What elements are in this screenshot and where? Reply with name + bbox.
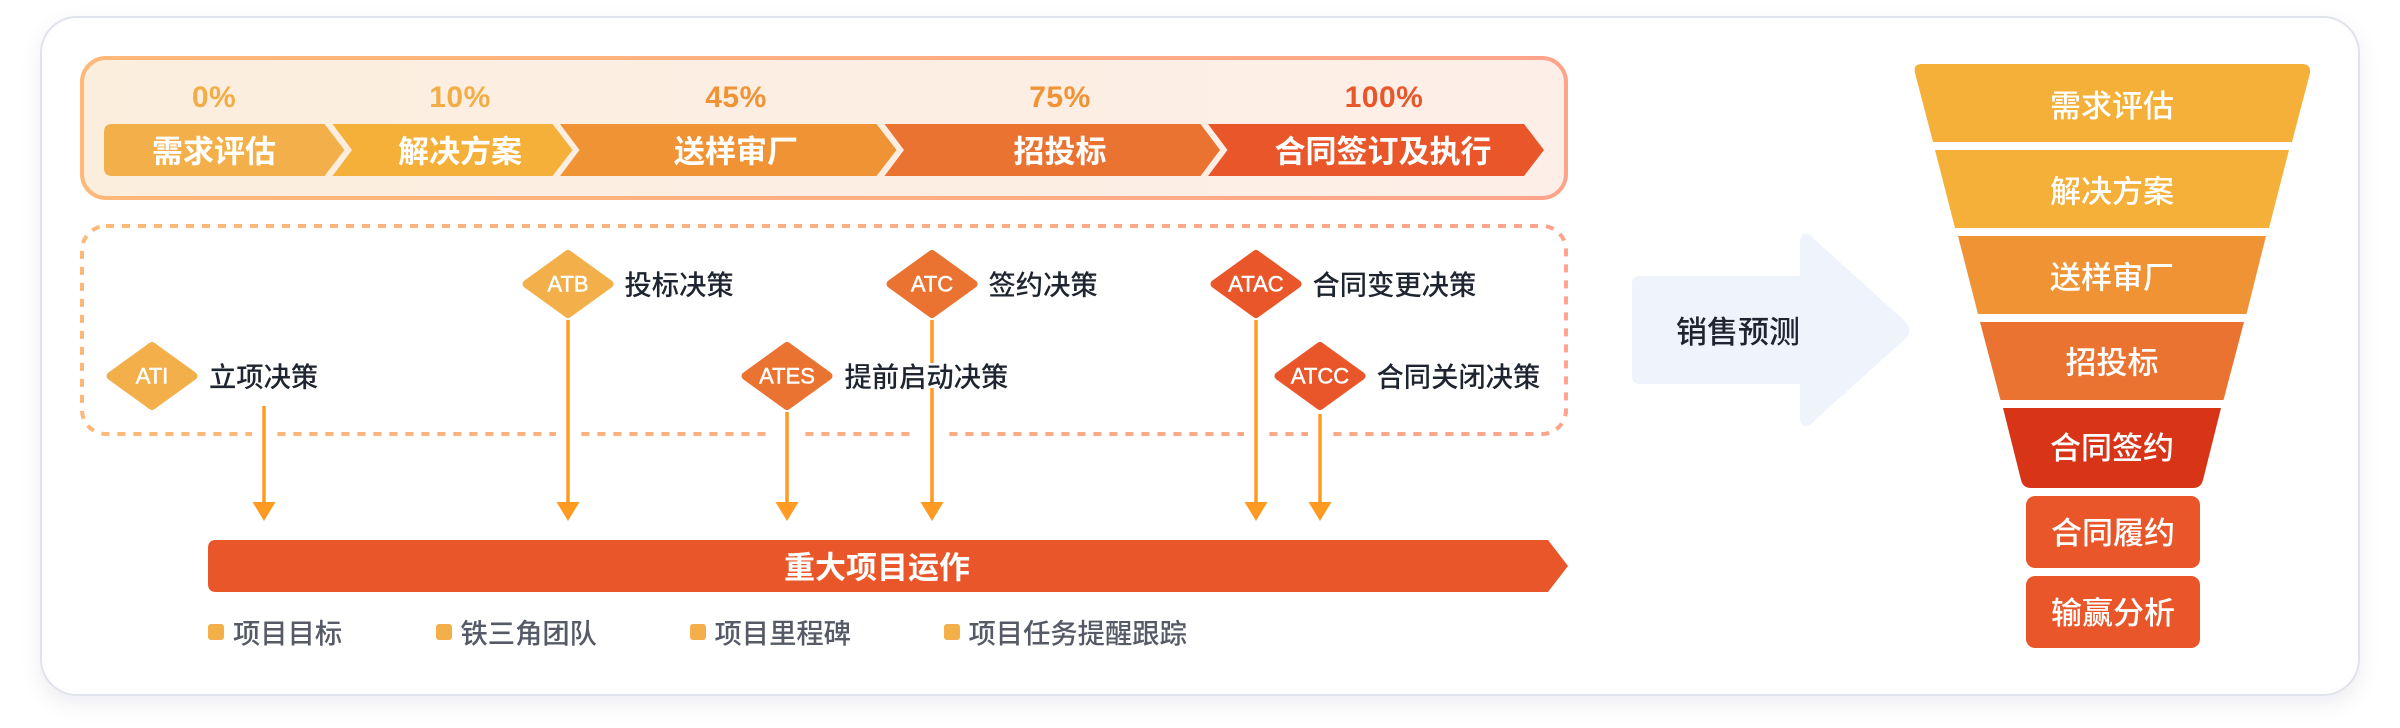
decision ATC with connector arrow: ATC: [911, 272, 953, 296]
stage box: 输赢分析: 输赢分析: [2051, 596, 2175, 631]
decision ATAC with connector arrow: [1214, 254, 1476, 521]
major project operation bar: 重大项目运作: [784, 550, 970, 586]
stage chevron: 合同签订及执行: 合同签订及执行: [1274, 134, 1492, 170]
stage chevron: 合同签订及执行: [1208, 124, 1544, 176]
decision ATCC with connector arrow: [1278, 346, 1540, 521]
stage box: 合同履约: 合同履约: [2051, 516, 2175, 551]
funnel level: 需求评估: 需求评估: [2050, 89, 2174, 124]
stage chevron: 需求评估: 需求评估: [152, 134, 276, 170]
funnel level: 招投标: [1980, 322, 2244, 400]
decision ATI with connector arrow: ATI: [136, 364, 168, 388]
decision ATES with connector arrow: 提前启动决策: [844, 362, 1008, 392]
legend item: 项目里程碑: 项目里程碑: [714, 618, 851, 649]
decision ATES with connector arrow: [746, 346, 1011, 521]
legend item: 铁三角团队: 铁三角团队: [460, 618, 597, 649]
funnel: [1915, 64, 2310, 648]
stage chevron: 解决方案: [332, 124, 572, 176]
decision ATI with connector arrow: 立项决策: [209, 362, 318, 392]
percentage: 10%: 10%: [429, 81, 491, 114]
legend: [208, 618, 1187, 649]
decision ATCC with connector arrow: 合同关闭决策: [1376, 362, 1540, 392]
percentage: 0%: 0%: [192, 81, 236, 114]
decision ATB with connector arrow: ATB: [547, 272, 589, 296]
funnel level: 招投标: 招投标: [2066, 346, 2158, 380]
decision ATB with connector arrow: [526, 254, 734, 521]
stage box: 合同履约: [2026, 496, 2200, 568]
percentage: 100%: 100%: [1345, 81, 1423, 114]
stage chevron: 送样审厂: [560, 124, 896, 176]
percentage: 75%: 75%: [1029, 81, 1091, 114]
panel: decision points dashed frame: [82, 226, 1566, 434]
major project operation bar: [208, 540, 1568, 592]
decision ATAC with connector arrow: 合同变更决策: [1312, 270, 1476, 300]
decision ATI with connector arrow: [110, 346, 318, 521]
stage chevron: 送样审厂: 送样审厂: [674, 134, 798, 170]
percentage: 45%: 45%: [705, 81, 767, 114]
legend item: 项目任务提醒跟踪: 项目任务提醒跟踪: [968, 618, 1187, 649]
decision ATES with connector arrow: ATES: [759, 364, 815, 388]
funnel level: 解决方案: 解决方案: [2050, 174, 2174, 210]
funnel level: 解决方案: [1935, 150, 2289, 228]
decision ATC with connector arrow: [890, 254, 1098, 521]
funnel level: 送样审厂: [1958, 236, 2266, 314]
decision ATAC with connector arrow: ATAC: [1228, 272, 1284, 296]
funnel level: 合同签约: [2003, 408, 2221, 488]
stage chevron: 需求评估: [104, 124, 344, 176]
decision ATB with connector arrow: 投标决策: [624, 270, 734, 300]
decision ATC with connector arrow: 签约决策: [988, 270, 1098, 300]
funnel level: 需求评估: [1915, 64, 2310, 142]
stage chevron: 招投标: [884, 124, 1220, 176]
stage chevron: 解决方案: 解决方案: [398, 134, 522, 170]
dashed frame gaps at connectors: [252, 428, 1332, 440]
legend item: 项目目标: 项目目标: [233, 618, 342, 649]
stage chevron: 招投标: 招投标: [1014, 134, 1106, 170]
stage box: 输赢分析: [2026, 576, 2200, 648]
big arrow: 销售预测: 销售预测: [1676, 315, 1800, 350]
panel: stage progress: [82, 58, 1566, 198]
funnel level: 合同签约: 合同签约: [2050, 431, 2174, 466]
funnel level: 送样审厂: 送样审厂: [2050, 260, 2174, 296]
big arrow: 销售预测: [1632, 234, 1910, 426]
decision ATCC with connector arrow: ATCC: [1291, 364, 1349, 388]
